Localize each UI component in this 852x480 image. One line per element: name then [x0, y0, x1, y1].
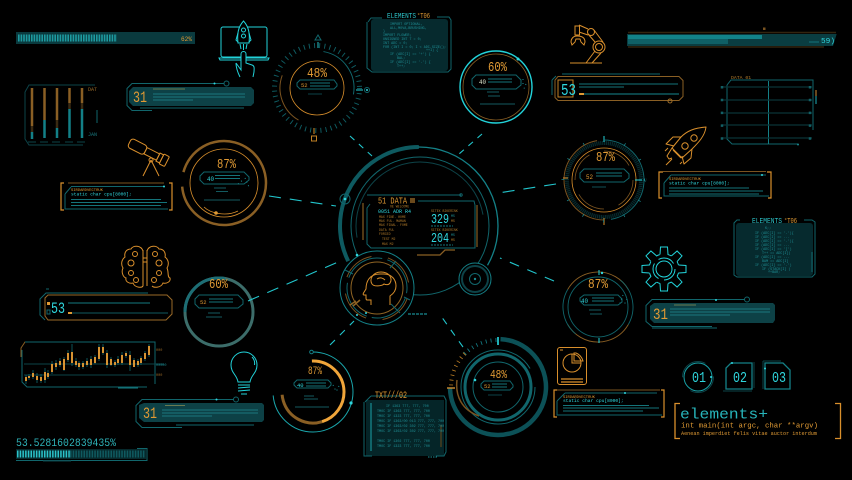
panel: TXT 02 code: TXT///02	[375, 390, 407, 402]
panel: data readout: 329	[431, 212, 449, 228]
panel: data readout: TEST M2	[382, 237, 395, 241]
panel: TXT 02 code	[364, 390, 446, 457]
panel: data readout: 0051 ADR R4	[378, 208, 412, 215]
panel: elements T06 code right: IF (ADC[I] == ...	[755, 235, 790, 240]
panel: data readout	[363, 194, 477, 255]
progress readout bottom-left	[16, 438, 147, 461]
badge 03	[763, 361, 790, 389]
gauge: 48 percent top with tick ring: 48%	[307, 66, 327, 82]
panel: 31 info bottom-left: 31	[143, 405, 157, 423]
icon: telescope	[127, 138, 169, 176]
panel: 31 info top-left: 31	[133, 89, 147, 107]
panel: elements T06 code top: ALL,MOVA,BRUSHING,	[390, 27, 427, 31]
connector tail	[408, 313, 428, 315]
panel: elements T06 code right: T++ == ADC[I])	[762, 251, 790, 256]
panel: elements T06 code top: ++I) {	[426, 48, 438, 53]
small node circle	[459, 263, 491, 295]
title block: elements+: elements+	[680, 406, 768, 424]
icon: gear	[642, 247, 686, 291]
progress readout bottom-left: 53.5281602839435%	[16, 438, 116, 450]
title block: elements+: int main(int argc, char **argv)	[681, 422, 818, 430]
panel: code block left: static char cpu[8000];	[71, 192, 132, 198]
panel: data readout: 204	[431, 231, 449, 247]
brain head circle	[336, 247, 418, 329]
panel: data 01 grid	[722, 75, 816, 146]
panel: data readout: OE WELCOME	[390, 204, 409, 208]
panel: 53 info left	[40, 289, 172, 320]
panel: elements T06 code top: IF (ADC[I] == '+') {	[390, 52, 431, 57]
panel: elements T06 code top: IF (ADC[I] == '-') {	[390, 60, 431, 65]
panel: TXT 02 code: TMOC IF 1323 777, 777, 700	[377, 445, 430, 449]
panel: code block right: SIRDARDVECTRUK	[669, 178, 702, 182]
panel: elements T06 code right: °T06	[784, 217, 797, 226]
panel: data readout: MS	[451, 214, 455, 218]
panel: elements T06 code top: }	[383, 29, 385, 34]
gauge: 87 percent left orange: 40	[207, 176, 214, 183]
central hub	[313, 120, 525, 332]
panel: data readout: MS	[451, 233, 455, 237]
panel: elements T06 code right: IF (ADC[I] == '.'){	[755, 239, 794, 244]
candlestick chart: 000	[156, 349, 162, 353]
panel: TXT 02 code: TMOC IF 1323 777, 777, 700	[377, 415, 430, 419]
top-left progress bar: 62%	[181, 36, 192, 43]
panel: TXT 02 code: TMOC IF 1363/02 302 777, 777, 700	[377, 429, 444, 434]
panel: elements T06 code top: BAL;	[397, 57, 405, 61]
gauge: 87 percent left orange	[173, 132, 275, 234]
title block: elements+: Aenean imperdiet felis vitae auctor interdum	[681, 431, 817, 437]
gauge: 60 percent top right: 60%	[488, 60, 507, 76]
panel: elements T06 code right: IF (ADC[I] == '-'){	[755, 231, 794, 236]
gauge: 48 percent big rings	[432, 321, 564, 453]
panel: data readout: MS	[451, 219, 455, 223]
gauge: 48 percent big rings: 48%	[490, 368, 508, 382]
panel: data 01 grid: DATA 01	[731, 75, 751, 81]
panel: TXT 02 code: IF 1363 777, 777, 700	[386, 405, 429, 409]
panel: data readout: MAX FINE. HOME	[379, 215, 406, 219]
gauge: 87 percent bottom with orange arc: 40	[297, 382, 304, 389]
candlestick chart: 000	[156, 374, 162, 378]
panel: elements T06 code right	[734, 217, 815, 277]
gauge: 48 percent top with tick ring	[266, 35, 370, 141]
gauge: 60 percent top right	[460, 51, 532, 123]
panel: slider bars	[25, 85, 97, 145]
panel: elements T06 code right: IF (ADC[I] == '.')	[755, 263, 792, 268]
title block: elements+	[675, 404, 840, 438]
badge 02: 02	[733, 370, 747, 387]
panel: TXT 02 code: TMOC IF 1302 777, 777, 700	[377, 440, 430, 444]
panel: elements T06 code right: IF (ADC[I] == '[')	[755, 247, 792, 252]
panel: data readout: 51 DATA	[378, 196, 407, 206]
panel: 31 info lower right: 31	[653, 306, 668, 324]
gauge: 87 percent bottom with orange arc	[273, 350, 353, 432]
icon: robot arm	[570, 25, 605, 63]
badge 02	[723, 362, 754, 391]
panel: 31 info bottom-left	[136, 397, 264, 428]
panel: elements T06 code top: IMPORT FLOWER;	[383, 34, 412, 38]
panel: code block bottom right: static char cpu[8000];	[563, 398, 624, 404]
panel: elements T06 code top: IMPORT OPTIONAL,	[390, 23, 423, 27]
panel: elements T06 code right: K;;	[765, 227, 771, 231]
panel: TXT 02 code: TMOC IF 1363 777, 777, 700	[377, 410, 430, 414]
panel: elements T06 code right: IF (STACK[I] )	[762, 267, 790, 272]
panel: code block left	[61, 183, 172, 210]
panel: elements T06 code top: FOR (INT I = 0; I < ADC.SIZE();	[383, 45, 446, 50]
panel: elements T06 code right: ELEMENTS	[752, 218, 782, 226]
panel: elements T06 code top	[367, 12, 451, 72]
panel: 53 info left: 53	[51, 300, 65, 318]
candlestick chart	[21, 342, 167, 388]
panel: TXT 02 code: TMOC IF 1363/02 302 777, 777, 700	[377, 424, 444, 429]
icon: light bulb	[231, 352, 257, 394]
panel: data readout: MAX FINAL. FOME	[379, 223, 408, 227]
gauge: 60 percent left: 60%	[209, 277, 228, 293]
panel: data readout: DATA FUL	[379, 228, 394, 232]
badge 01	[682, 362, 714, 392]
panel: data readout: SITEX BIKERINK	[431, 228, 458, 232]
gauge: 87 percent right: 87%	[596, 150, 615, 166]
gauge: 60 percent left: 52	[200, 299, 207, 306]
panel: code block right	[659, 172, 771, 198]
gauge: 48 percent big rings: 52	[484, 383, 491, 390]
panel: data readout: MS	[451, 238, 455, 242]
candlestick chart: 00000	[156, 364, 167, 368]
panel: elements T06 code right: ++BAR;	[768, 271, 780, 275]
panel: elements T06 code top: T++;	[397, 65, 405, 69]
panel: data readout: MAX M2	[382, 242, 394, 246]
dashed connectors	[248, 134, 556, 347]
panel: elements T06 code top: ELEMENTS	[387, 13, 416, 21]
panel: 53 info top right: 53	[561, 82, 576, 101]
panel: data readout: SITEX BIKERINK	[431, 209, 458, 213]
gauge: 87 percent lower right: 87%	[588, 277, 608, 293]
panel: elements T06 code top: INT ADC = 0;	[383, 42, 407, 46]
top-right progress bar: 59)	[821, 38, 835, 46]
icon: rocket over laptop with hand	[219, 21, 269, 77]
panel: code block right: static char cpu[8000];	[669, 180, 730, 186]
icon: rocket right	[665, 127, 706, 165]
panel: elements T06 code right: BAM == ADC[I]	[762, 259, 788, 264]
panel: code block bottom right: SIRDARDVECTRUK	[563, 396, 596, 400]
panel: 31 info top-left	[127, 81, 254, 110]
panel: elements T06 code right: IF (ADC[I] == ...	[755, 255, 790, 260]
icon: brain	[122, 246, 170, 287]
gauge: 87 percent bottom with orange arc: 87%	[308, 366, 322, 378]
panel: elements T06 code right: IF (ADC[I] == ...	[755, 243, 790, 248]
badge 01: 01	[692, 370, 706, 387]
panel: slider bars: JAN	[88, 132, 97, 138]
top-left progress bar	[16, 32, 195, 44]
gauge: 87 percent left orange: 87%	[217, 157, 236, 173]
panel: TXT 02 code: TMOC IF 1363/00 013 777, 777, 700	[377, 419, 444, 424]
panel: 31 info lower right	[646, 297, 775, 328]
panel: data readout: FORCED	[379, 232, 391, 236]
badge 03: 03	[772, 370, 786, 387]
gauge: 48 percent top with tick ring: 52	[301, 82, 308, 89]
gauge: 87 percent right: 52	[586, 174, 593, 181]
panel: 53 info top right	[552, 74, 683, 103]
icon: pie chart document	[558, 348, 586, 384]
panel: code block left: SIRDARDVECTRUK	[71, 189, 104, 193]
panel: elements T06 code top: °T06	[417, 12, 430, 21]
panel: slider bars: DAT	[88, 87, 97, 93]
top-right progress bar	[627, 28, 840, 47]
panel: code block bottom right	[554, 390, 664, 417]
gauge: 87 percent lower right	[549, 258, 647, 356]
gauge: 87 percent right	[563, 136, 645, 225]
gauge: 60 percent top right: 40	[479, 79, 486, 86]
gauge: 60 percent left	[185, 277, 253, 346]
panel: data readout: MAX FUL. MAMAN	[379, 219, 406, 223]
panel: elements T06 code top: UNSIGNED INT T = 0;	[383, 38, 422, 42]
gauge: 87 percent lower right: 40	[581, 298, 588, 305]
